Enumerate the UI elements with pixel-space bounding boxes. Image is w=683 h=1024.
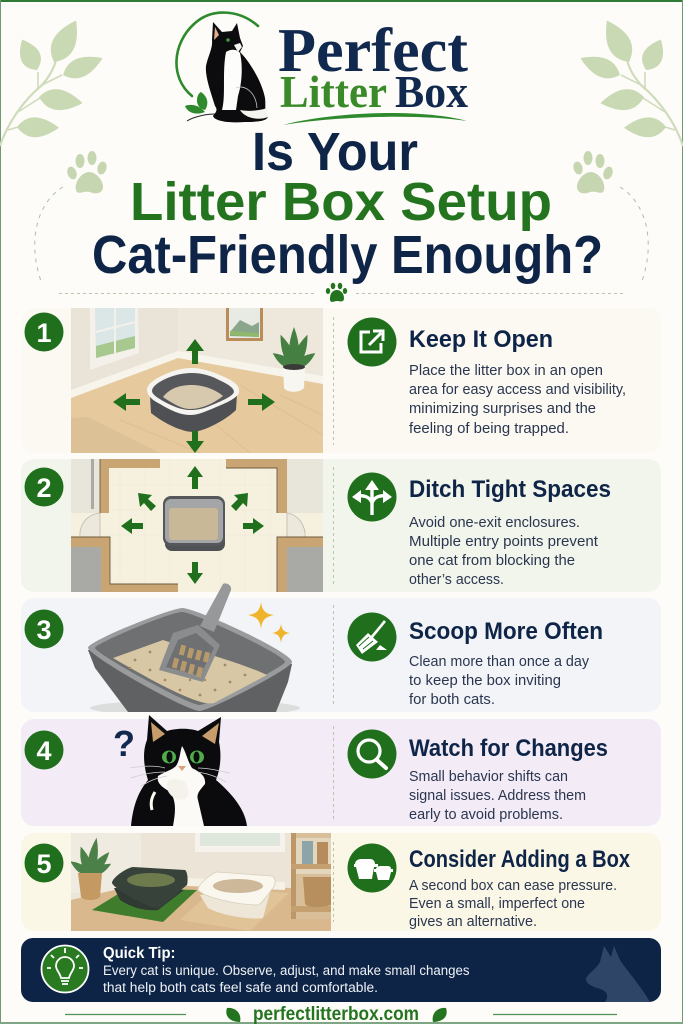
heading and body 5: A second box can ease pressure. — [409, 878, 617, 894]
divider paw — [326, 283, 347, 302]
number badge 2: 2 — [36, 473, 52, 503]
logo wordmark: Box — [395, 67, 468, 117]
heading and body 4: early to avoid problems. — [409, 807, 563, 823]
panel: step 1 keep it open — [21, 308, 661, 453]
dark box — [112, 867, 188, 910]
heading and body 2: Avoid one-exit enclosures. — [409, 515, 580, 531]
arrows — [113, 339, 275, 453]
plant — [71, 838, 112, 900]
heading and body 5: gives an alternative. — [409, 914, 537, 930]
paw right — [572, 151, 614, 193]
litter box top view — [163, 496, 225, 551]
number badge 5 — [24, 844, 64, 882]
panel: step 2 ditch tight spaces — [21, 459, 661, 592]
logo cat — [206, 22, 268, 122]
illustration: litter tray and scoop — [88, 583, 300, 716]
cream box — [198, 872, 275, 919]
heading and body 2: other’s access. — [409, 572, 504, 588]
illustration: two litter boxes — [68, 833, 331, 931]
icon: magnifier — [348, 730, 396, 778]
panel: quick tip — [21, 938, 661, 1002]
logo wordmark — [278, 17, 468, 117]
title: Litter Box Setup — [130, 172, 552, 232]
footer leaf right — [433, 1008, 447, 1022]
panel: step 3 scoop more often — [21, 583, 661, 716]
heading and body 3: Scoop More Often — [409, 618, 603, 645]
icon: scoop — [348, 612, 396, 662]
plant — [270, 327, 318, 392]
logo — [176, 13, 468, 125]
heading and body 1: Place the litter box in an open — [409, 363, 603, 379]
cat silhouette — [586, 946, 650, 1002]
tan mat — [180, 892, 288, 931]
logo arc — [176, 13, 258, 96]
scoop — [159, 583, 231, 682]
heading and body 1: minimizing surprises and the — [409, 401, 596, 417]
heading and body 1: area for easy access and visibility, — [409, 382, 626, 398]
decorative leaf branch left — [0, 15, 106, 146]
heading and body 5: Consider Adding a Box — [409, 846, 630, 873]
number badge 1 — [24, 312, 64, 352]
illustration: floor plan — [71, 459, 323, 592]
illustration: thinking cat — [130, 715, 247, 826]
logo wordmark: Perfect — [278, 17, 468, 85]
heading and body 1 — [409, 326, 626, 437]
title: Cat-Friendly Enough? — [92, 225, 603, 285]
sparkles — [248, 602, 290, 643]
heading and body 4: Watch for Changes — [409, 735, 608, 762]
heading and body 4 — [409, 735, 608, 823]
shelf — [291, 833, 331, 919]
number badge 3: 3 — [36, 615, 52, 645]
heading and body 2 — [409, 476, 611, 588]
heading and body 3 — [409, 618, 603, 708]
heading and body 2: one cat from blocking the — [409, 553, 575, 569]
icon: three-way arrows — [348, 472, 396, 522]
heading and body 5: Even a small, imperfect one — [409, 896, 585, 912]
decorative leaf branch right — [577, 15, 683, 146]
illustration: open room — [71, 308, 323, 453]
arrows — [121, 466, 264, 584]
heading and body 5 — [409, 846, 630, 930]
number badge 4 — [24, 730, 64, 770]
heading and body 3: for both cats. — [409, 692, 495, 708]
heading and body 2: Multiple entry points prevent — [409, 534, 598, 550]
green mat — [92, 888, 197, 922]
panel: step 5 consider adding a box — [21, 833, 661, 931]
footer leaf left — [226, 1008, 240, 1022]
panel: step 4 watch for changes — [21, 715, 661, 826]
footer — [65, 1004, 617, 1024]
heading and body 3: Clean more than once a day — [409, 654, 590, 670]
number badge 1: 1 — [36, 318, 52, 348]
number badge 4: 4 — [36, 736, 52, 766]
tip text: that help both cats feel safe and comfortable. — [103, 980, 378, 995]
number badge 3 — [24, 610, 64, 648]
tip text — [103, 945, 470, 995]
logo swoosh — [283, 113, 467, 125]
heading and body 3: to keep the box inviting — [409, 673, 561, 689]
number badge 2 — [24, 468, 64, 506]
icon: light bulb — [42, 946, 88, 992]
heading and body 1: Keep It Open — [409, 326, 553, 353]
title: Is Your — [252, 122, 418, 182]
icon: open box arrow — [348, 318, 396, 366]
litter box — [147, 368, 239, 432]
heading and body 1: feeling of being trapped. — [409, 421, 569, 437]
logo leaves — [185, 92, 215, 121]
question mark: ? — [113, 723, 135, 764]
logo wordmark: Litter — [280, 67, 387, 117]
heading and body 2: Ditch Tight Spaces — [409, 476, 611, 503]
paw left — [66, 151, 108, 193]
heading and body 4: signal issues. Address them — [409, 788, 586, 804]
title — [92, 122, 603, 285]
heading and body 4: Small behavior shifts can — [409, 769, 568, 785]
tip text: Every cat is unique. Observe, adjust, and make small changes — [103, 963, 470, 978]
number badge 5: 5 — [36, 849, 52, 879]
tip text: Quick Tip: — [103, 945, 176, 962]
icon: two boxes — [348, 844, 396, 892]
